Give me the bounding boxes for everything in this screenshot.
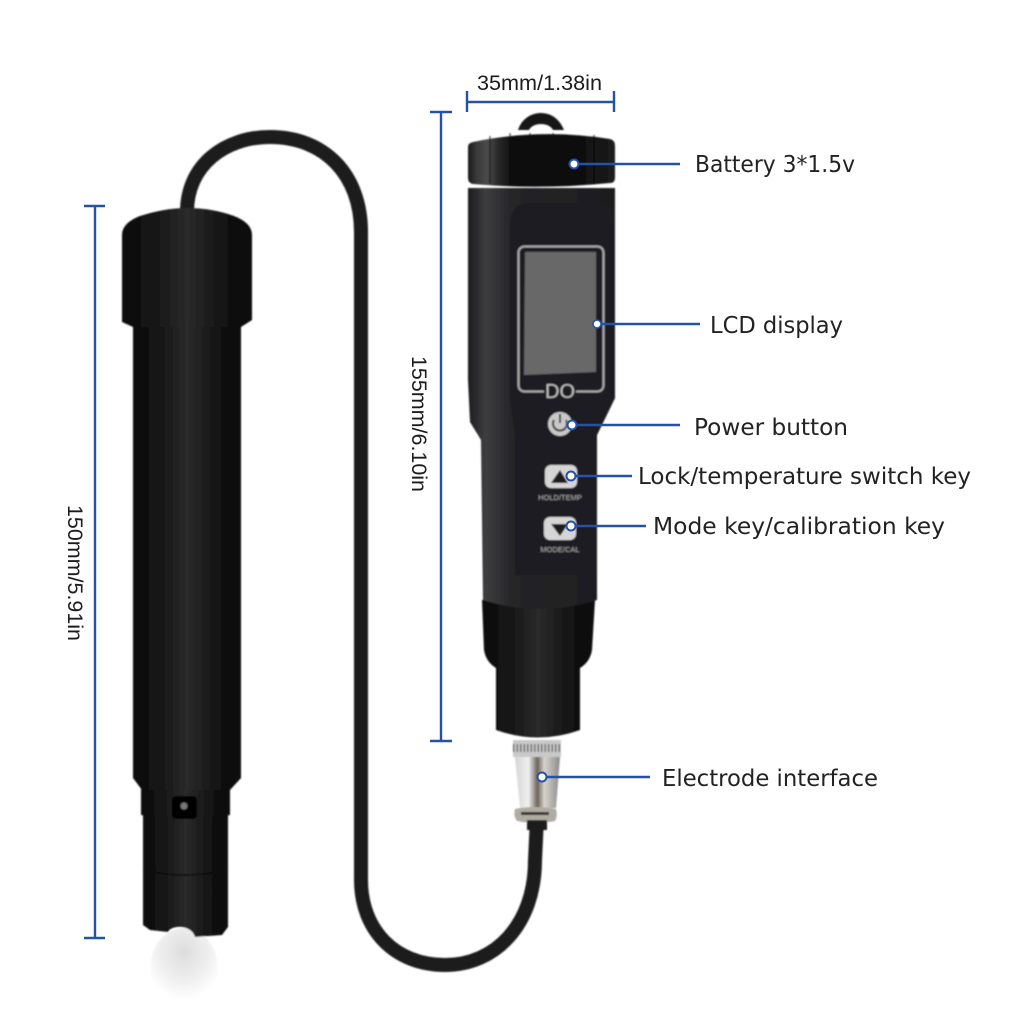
screw cap xyxy=(468,133,615,187)
LCD screen xyxy=(524,252,596,375)
callout: LCD display xyxy=(593,313,843,339)
probe height dimension xyxy=(63,206,105,938)
LCD bezel xyxy=(518,246,604,392)
cable xyxy=(187,137,537,965)
callout: power button: Power button xyxy=(694,415,848,441)
callout: battery xyxy=(570,152,855,178)
mode key xyxy=(540,517,580,554)
hanging lug xyxy=(518,113,564,130)
callout: electrode interface: Electrode interface xyxy=(662,766,878,792)
callout: lock/temperature key: Lock/temperature switch key xyxy=(638,464,971,490)
front panel xyxy=(510,203,615,575)
callout: power button xyxy=(568,415,848,441)
hold key: HOLD/TEMP xyxy=(538,493,582,502)
meter height dimension: 155mm/6.10in xyxy=(407,356,431,492)
callout: mode key: Mode key/calibration key xyxy=(653,514,945,540)
meter body xyxy=(468,113,615,830)
power button xyxy=(548,412,572,436)
callout: electrode interface xyxy=(538,766,878,792)
lower neck xyxy=(482,600,595,738)
mode key: MODE/CAL xyxy=(540,545,580,554)
callout: battery: Battery 3*1.5v xyxy=(695,152,855,178)
DO label: DO xyxy=(545,381,575,403)
callout: LCD display: LCD display xyxy=(710,313,843,339)
probe electrode xyxy=(122,208,252,1008)
handle xyxy=(468,188,615,609)
width dimension xyxy=(467,71,614,112)
meter height dimension xyxy=(407,112,452,741)
electrode connector xyxy=(513,740,561,830)
hold key xyxy=(538,465,582,502)
probe height dimension: 150mm/5.91in xyxy=(63,505,87,641)
width dimension: 35mm/1.38in xyxy=(477,71,602,95)
